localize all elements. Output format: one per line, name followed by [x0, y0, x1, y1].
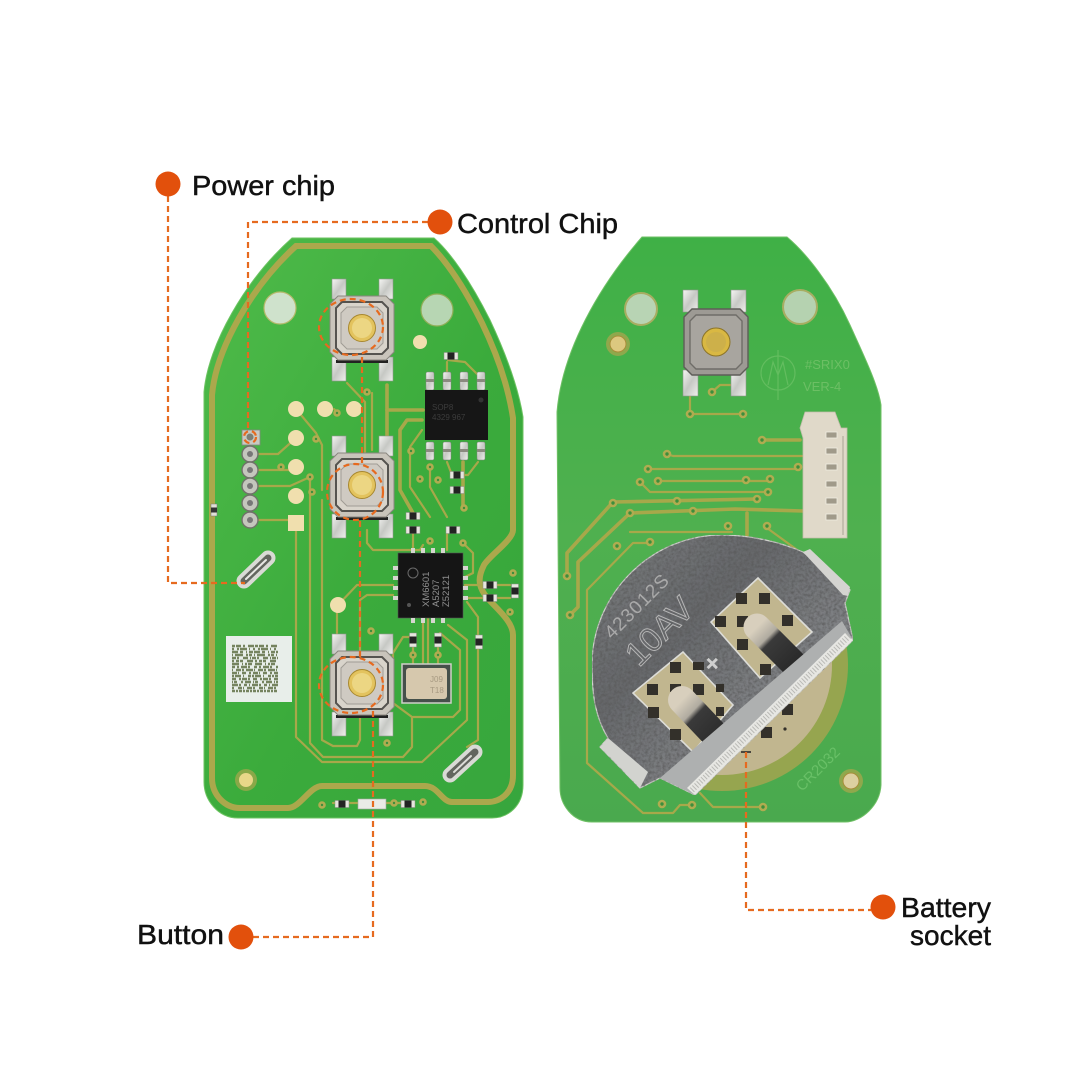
hatched cut edge [687, 633, 853, 795]
board outline [557, 237, 881, 822]
small surface components [335, 352, 518, 809]
upper window [711, 578, 812, 678]
control chip: QFN [393, 548, 468, 623]
gold pad: bottom [839, 769, 863, 793]
callout: control chip [244, 208, 618, 443]
light inner band [660, 621, 853, 795]
panel: left circuit board (front) [204, 238, 523, 818]
copper traces [567, 385, 803, 813]
thin copper traces [250, 360, 510, 803]
power chip: SOP8: SOP8 [432, 403, 454, 412]
mounting hole: left [625, 293, 657, 325]
battery socket clip: + [696, 647, 728, 679]
maker logo and version mark: #SRIX0 [805, 357, 850, 372]
crystal oscillator [402, 664, 451, 703]
crystal oscillator: J09 [430, 675, 443, 684]
battery socket clip [592, 535, 853, 795]
callout: battery socket: Battery [901, 892, 991, 923]
callout: control chip: Control Chip [457, 208, 618, 239]
callout: power chip [156, 170, 335, 583]
stamped marks: 423012S [601, 570, 674, 644]
lower spring tongue [682, 700, 720, 740]
battery type marking: CR2032 [793, 744, 844, 795]
callout: battery socket: socket [910, 920, 991, 951]
control chip: QFN: Z52121 [441, 575, 452, 607]
control chip: QFN: A5207 [431, 580, 442, 607]
callout: button: Button [137, 919, 224, 950]
metal plate [592, 535, 853, 795]
power chip: SOP8 [425, 372, 488, 460]
upper tab [803, 549, 850, 596]
lower tab [600, 738, 648, 788]
callout: battery socket [741, 752, 991, 951]
maker logo and version mark [761, 350, 850, 400]
crystal oscillator: T18 [430, 686, 444, 695]
window perforations [647, 593, 793, 740]
battery contact pad [596, 539, 848, 791]
power chip pin header [242, 430, 260, 528]
gold pad: top [606, 332, 630, 356]
vias [564, 389, 801, 810]
mounting hole: right [421, 294, 453, 326]
data matrix label [226, 636, 292, 702]
gold perimeter trace [212, 246, 513, 808]
lower window [633, 652, 733, 752]
button: bottom [330, 634, 394, 736]
upper spring tongue [757, 627, 794, 664]
callout: power chip: Power chip [192, 170, 335, 201]
mounting hole: right [783, 290, 817, 324]
mounting hole: left [264, 292, 296, 324]
small component near header [211, 504, 217, 516]
power chip: SOP8: 4329 967 [432, 413, 466, 422]
solder slot: left (power chip contact) [244, 558, 268, 581]
connector [800, 412, 847, 538]
test pads [235, 335, 427, 791]
vias [278, 390, 516, 808]
maker logo and version mark: VER-4 [803, 379, 841, 394]
button: back [683, 290, 748, 396]
board outline [204, 238, 523, 818]
callout: button [137, 299, 383, 950]
battery socket clip: 10AV [618, 590, 702, 674]
button: middle [330, 436, 394, 538]
solder slot: right [450, 752, 475, 775]
button: top [330, 279, 394, 381]
control chip: QFN: XM6601 [421, 572, 432, 607]
panel: right circuit board (back) [557, 237, 881, 822]
